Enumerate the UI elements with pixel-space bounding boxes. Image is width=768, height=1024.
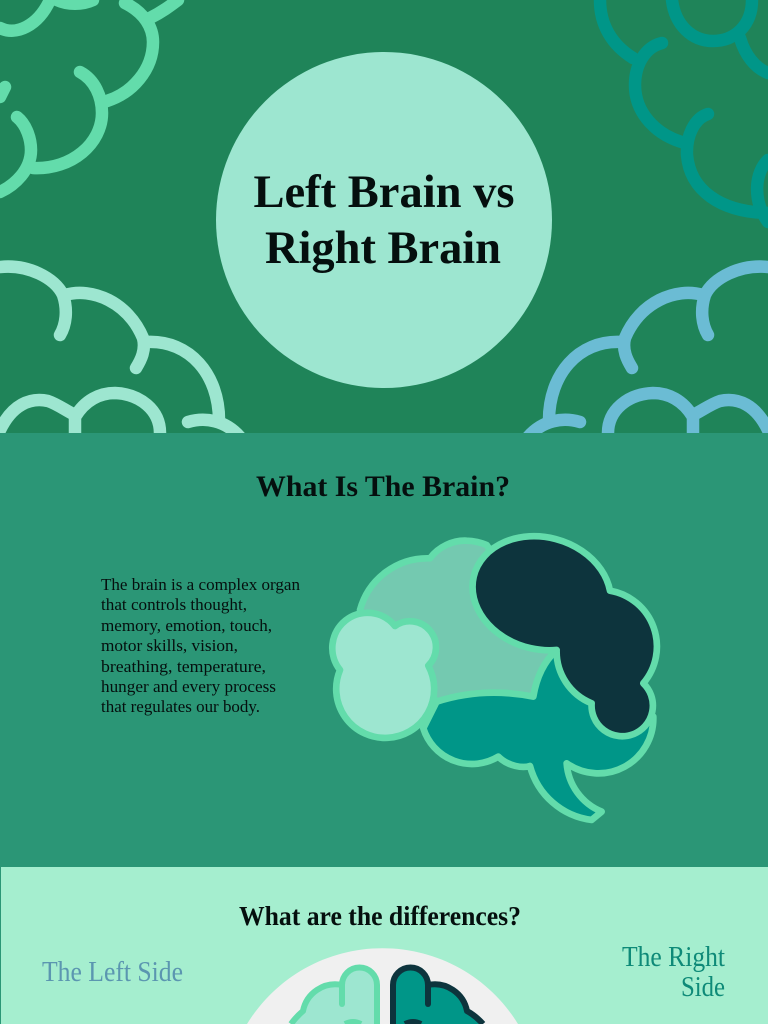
text block: brain description: motor skills, vision, bbox=[101, 636, 238, 655]
text block: brain description: that regulates our body. bbox=[101, 697, 260, 716]
brain lobe: middle bbox=[360, 541, 557, 702]
brain lobe: dark bbox=[473, 536, 657, 736]
panel: title section background bbox=[0, 0, 768, 433]
icon: coloured brain illustration bbox=[332, 536, 657, 820]
panel: title circle bbox=[216, 52, 552, 388]
text block: brain description: breathing, temperature, bbox=[101, 657, 266, 676]
icon: top-left brain outline bbox=[0, 0, 178, 192]
brain lobe: light bbox=[332, 613, 436, 738]
label: the left side: The Left Side bbox=[42, 957, 183, 988]
circle backdrop bbox=[247, 948, 518, 1024]
right hemisphere bbox=[393, 968, 483, 1024]
text block: brain description: hunger and every process bbox=[101, 677, 276, 696]
text block: brain description bbox=[101, 575, 300, 716]
left hemisphere bbox=[291, 968, 377, 1024]
text block: brain description: The brain is a complex organ bbox=[101, 575, 300, 594]
heading: what is the brain: What Is The Brain? bbox=[256, 470, 510, 503]
panel: differences background bbox=[1, 867, 768, 1024]
text block: brain description: that controls thought, bbox=[101, 595, 247, 614]
label: the right side bbox=[622, 942, 725, 1003]
brain lobe: lower teal bbox=[423, 650, 653, 820]
label: the right side: Side bbox=[681, 972, 725, 1003]
heading: what are the differences: What are the differences? bbox=[239, 901, 521, 931]
text block: brain description: memory, emotion, touch, bbox=[101, 616, 272, 635]
icon: split brain on circle bbox=[247, 948, 518, 1024]
title second line: Right Brain bbox=[265, 222, 501, 274]
icon: top-right brain outline bbox=[600, 0, 768, 222]
panel: what is the brain background bbox=[0, 433, 768, 867]
icon: bottom-right brain outline bbox=[528, 267, 768, 437]
label: the right side: The Right bbox=[622, 942, 725, 973]
title: Left Brain vs bbox=[254, 166, 514, 218]
icon: bottom-left brain outline bbox=[0, 267, 240, 437]
